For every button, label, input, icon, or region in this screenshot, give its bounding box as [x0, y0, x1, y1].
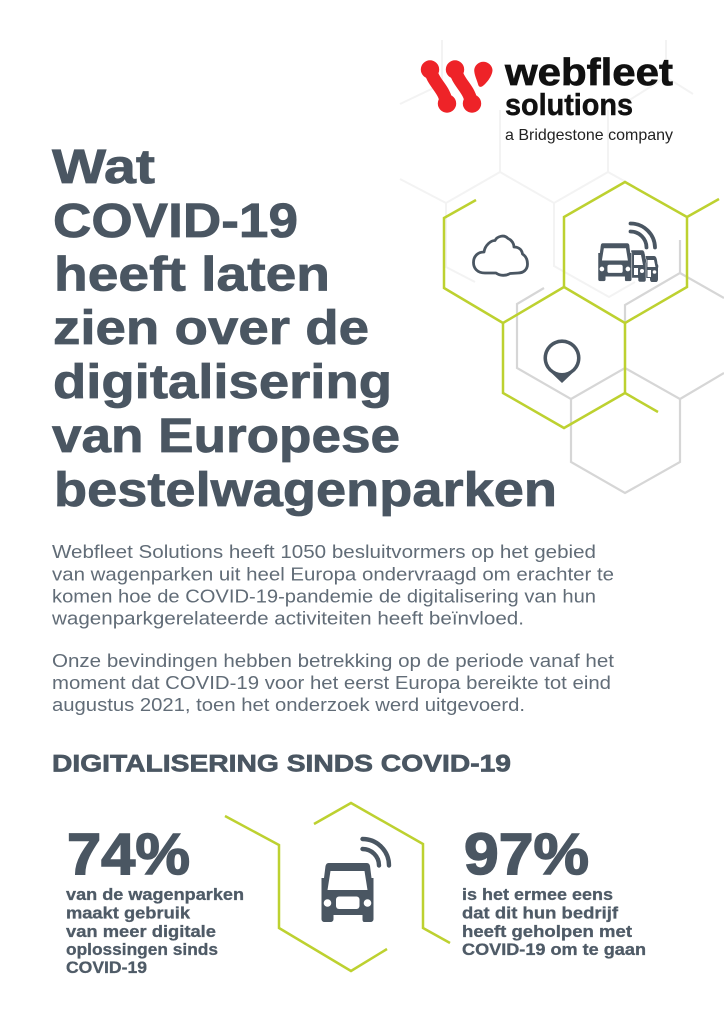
- title: heeft laten: [54, 248, 330, 302]
- stat description: [462, 886, 646, 959]
- stat description: is het ermee eens: [462, 886, 613, 904]
- title: bestelwagenparken: [54, 463, 557, 517]
- bottom green hexagon: [225, 803, 450, 971]
- icon: cloud: [474, 236, 528, 275]
- title: zien over de: [53, 301, 369, 355]
- title: van Europese: [52, 409, 400, 463]
- logo wordmark: webfleet: [504, 52, 673, 94]
- intro paragraph: komen hoe de COVID-19-pandemie de digitalisering van hun: [52, 586, 596, 606]
- logo tagline: a Bridgestone company: [505, 127, 673, 144]
- stat description: van meer digitale: [66, 923, 216, 941]
- stat description: maakt gebruik: [66, 904, 191, 922]
- second van: [631, 250, 646, 282]
- logo wordmark second line: solutions: [505, 87, 633, 122]
- stat description: COVID-19 om te gaan: [462, 941, 646, 959]
- title: Wat: [52, 140, 155, 194]
- signal waves: [362, 839, 389, 866]
- stat description: [66, 886, 244, 977]
- title: [52, 140, 557, 517]
- third van windows: [648, 260, 656, 277]
- logo mark: [421, 60, 492, 113]
- third van: [645, 256, 658, 282]
- findings paragraph: moment dat COVID-19 voor het eerst Europa bereikte tot eind: [52, 673, 611, 693]
- stat number: 74%: [67, 822, 190, 887]
- icon: convoy of connected vans: [598, 224, 658, 282]
- logo: Webfleet Solutions: [421, 52, 673, 144]
- intro paragraph: Webfleet Solutions heeft 1050 besluitvormers op het gebied: [52, 542, 596, 562]
- stat description: oplossingen sinds: [66, 941, 218, 959]
- stat description: van de wagenparken: [66, 886, 244, 904]
- van body: [322, 863, 374, 922]
- green hexagon outlines: [444, 182, 719, 428]
- title: COVID-19: [53, 194, 298, 248]
- stat description: COVID-19: [66, 959, 147, 977]
- intro paragraph: wagenparkgerelateerde activiteiten heeft beïnvloed.: [51, 608, 524, 628]
- stat: 97%: [462, 822, 646, 959]
- intro paragraph: van wagenparken uit heel Europa ondervraagd om erachter te: [52, 564, 614, 584]
- findings paragraph: augustus 2021, toen het onderzoek werd uitgevoerd.: [52, 695, 525, 715]
- icon: map pin: [544, 339, 581, 383]
- title: digitalisering: [53, 355, 392, 409]
- intro paragraph: [51, 542, 614, 628]
- background hexagon pattern: grey: [517, 240, 724, 493]
- main van: [598, 243, 632, 281]
- signal waves: [630, 224, 655, 248]
- stat description: heeft geholpen met: [462, 923, 633, 941]
- second van windows: [634, 255, 643, 275]
- stat number: 97%: [464, 822, 589, 887]
- stat: 74%: [66, 822, 244, 977]
- background hexagon pattern: light: [400, 40, 693, 297]
- findings paragraph: [52, 651, 614, 715]
- section heading: DIGITALISERING SINDS COVID-19: [52, 750, 511, 778]
- stat description: dat dit hun bedrijf: [462, 904, 619, 922]
- findings paragraph: Onze bevindingen hebben betrekking op de periode vanaf het: [52, 651, 614, 671]
- icon: connected van: [322, 839, 389, 922]
